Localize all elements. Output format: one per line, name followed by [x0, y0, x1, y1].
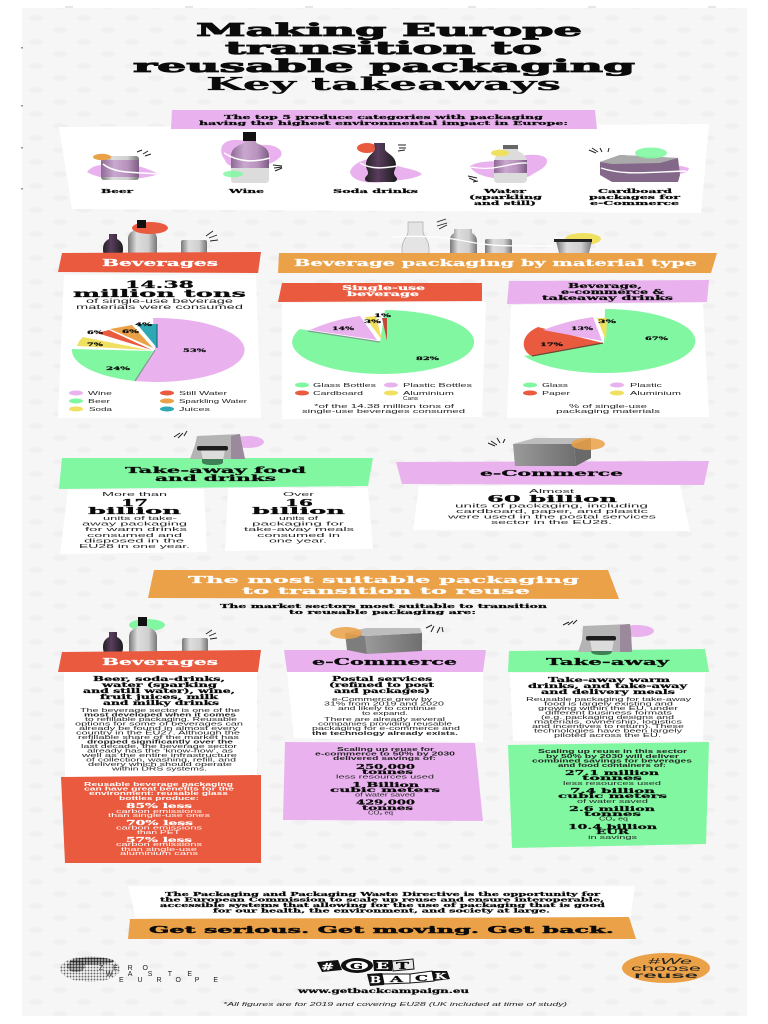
banner: top 5 heading — [171, 110, 597, 129]
callout: beverage benefits: 57% less — [126, 836, 193, 844]
text: beverages sector description: last decade, the beverage sector — [81, 744, 238, 750]
callout: e-commerce savings: 250,000 — [356, 763, 416, 771]
callout: take-away savings: less resources used — [563, 781, 661, 787]
callout: e-commerce savings: cubic meters — [330, 786, 441, 794]
title: Key takeaways — [206, 74, 561, 95]
text: e-commerce description: packaging for e-commerce and — [312, 726, 460, 732]
legend: single-use beverage: Plastic Bottles — [403, 383, 472, 389]
callout: take-away savings: tonnes — [584, 810, 642, 818]
panel: directive statement — [128, 886, 635, 920]
text: beverages sector description: delivery which should operate — [88, 762, 232, 768]
text: take-away description: Reusable packaging for take-away — [526, 697, 692, 703]
legend: single-use beverage: Aluminium — [403, 391, 455, 397]
text: take-away description: different business formats — [545, 710, 673, 716]
legend: beverages: Sparkling Water — [179, 399, 247, 405]
banner: beverages sector: Beverages — [102, 657, 218, 668]
panel: take-away food and drinks — [59, 458, 373, 554]
icon: takeaway bag — [563, 620, 654, 655]
callout: take-away savings: Scaling up reuse in this sector — [538, 749, 687, 755]
title: Making Europe — [196, 20, 582, 41]
logo: get back: T — [396, 962, 410, 972]
banner: beverages — [58, 252, 261, 273]
banner: single-use beverage — [278, 283, 482, 302]
legend: packaging materials: Paper — [542, 391, 570, 397]
text: e-commerce description: the technology already exists. — [312, 731, 459, 737]
text: take-away description — [526, 697, 692, 739]
legend: beverages: Soda — [89, 407, 114, 413]
callout: take-away savings: and food containers of: — [558, 763, 667, 769]
callout: take-away savings: EUR — [596, 828, 630, 836]
stat: 16 billion: consumed in — [257, 533, 340, 539]
text: e-commerce description: to expand. — [362, 711, 408, 717]
banner: beverage e-commerce takeaway: takeaway drinks — [542, 295, 674, 302]
legend: packaging materials — [523, 382, 682, 397]
label: water: Water — [482, 189, 526, 195]
text: take-away description: growing within the EU, under — [538, 706, 679, 712]
heading: beverages sector: fruit juices, milk — [100, 694, 220, 701]
title: transition to — [225, 38, 542, 59]
logo: we choose reuse: choose — [631, 964, 702, 973]
stat: 14.38 million tons: of single-use beverage — [86, 299, 235, 305]
callout: beverage benefits: environment: reusable glass — [89, 791, 228, 797]
pie chart: packaging materials: 17% — [540, 342, 563, 348]
callout: take-away savings: tonnes — [582, 774, 643, 782]
subheading: market sectors: to reusable packaging are: — [289, 610, 476, 616]
heading: take-away sector: drinks, and take-away — [528, 683, 688, 690]
banner: call to action: Get serious. Get moving. Get back. — [149, 925, 614, 936]
banner: e-commerce — [396, 461, 709, 485]
callout: beverage benefits: than PET — [137, 830, 180, 836]
banner: beverage packaging by material type: Beverage packaging by material type — [294, 258, 697, 269]
stat: 17 billion: billion — [88, 506, 181, 517]
stat: 14.38 million tons — [73, 280, 247, 311]
panel: top 5 produce categories — [59, 110, 709, 213]
text: e-commerce description: and likely to continue — [338, 706, 436, 712]
logo: get back: A — [388, 974, 405, 984]
label: wine: Wine — [227, 189, 265, 195]
label: water — [469, 189, 542, 207]
stat: 17 billion: disposed in the — [84, 538, 184, 544]
text: e-commerce description: companies providing reusable — [318, 722, 452, 728]
text: beverages sector description: country in the EU27. Although the — [76, 730, 240, 736]
pie chart: beverages: 4% — [135, 322, 153, 328]
legend: beverages: Beer — [88, 399, 110, 405]
stat: 16 billion: take-away meals — [244, 527, 354, 533]
text: beverages sector description: refillable share of the market has — [78, 735, 240, 741]
banner: take-away food and drinks — [59, 458, 373, 489]
logo: zero waste europe — [60, 956, 218, 984]
panel: beverage e-commerce takeaway — [507, 280, 709, 418]
legend: single-use beverage: Cans — [403, 396, 418, 402]
callout: beverage benefits: Reusable beverage packaging — [84, 782, 233, 788]
title — [133, 20, 636, 95]
stat: 16 billion: one year. — [269, 538, 328, 544]
heading: beverages sector — [83, 676, 235, 707]
banner: beverage e-commerce takeaway: Beverage, — [568, 283, 642, 290]
pie chart: beverages: 7% — [87, 342, 103, 348]
legend: packaging materials: Aluminium — [630, 391, 682, 397]
heading: e-commerce sector: (refined to post — [329, 682, 434, 689]
text: beverages sector description: of collection, washing, refill, and — [86, 758, 236, 764]
callout: take-away savings: CO₂ eq — [599, 816, 628, 822]
callout: beverage benefits: aluminium cans — [120, 851, 199, 857]
icon: cardboard box — [589, 148, 689, 182]
stat: 17 billion — [60, 489, 207, 554]
logo: zero waste europe: EUROPE — [119, 977, 218, 984]
banner: top 5 heading: having the highest environmental impact in Europe: — [199, 121, 568, 127]
panel: single-use beverage — [278, 283, 486, 419]
stat: 60 billion: units of packaging, including — [455, 504, 648, 510]
pie chart: beverages: 53% — [183, 348, 206, 354]
banner: take-away sector — [508, 649, 709, 672]
pie chart: single-use beverage: 3% — [364, 319, 382, 325]
callout: take-away savings: of water saved — [577, 799, 648, 805]
pie chart: beverages: 6% — [122, 329, 140, 335]
pie chart: single-use beverage — [292, 310, 474, 374]
panel: e-commerce — [396, 461, 709, 531]
text: take-away description: piloted across the EU. — [554, 733, 661, 739]
banner: beverages: Beverages — [102, 258, 218, 269]
text: beverages sector description: already be found in almost every — [79, 726, 239, 732]
stat: 17 billion: 17 — [121, 498, 148, 509]
label: soda drinks: Soda drinks — [333, 189, 418, 195]
pie chart: beverages: 24% — [106, 366, 130, 372]
note: packaging materials — [556, 404, 661, 415]
callout: e-commerce savings: e-commerce to 50% by 2030 — [315, 752, 455, 758]
text: take-away description: materials, ownership, logistics — [534, 720, 683, 726]
panel: directive statement: for our health, the environment, and society at large. — [213, 908, 550, 914]
text: beverages sector description — [75, 708, 243, 772]
text: e-commerce description: 31% from 2019 and 2020 — [324, 702, 444, 708]
callout: beverage benefits: than single-use ones — [108, 813, 211, 819]
callout: beverage benefits: carbon emissions — [116, 809, 203, 815]
logo: zero waste europe: ZERO — [99, 965, 149, 972]
text: e-commerce description — [312, 697, 460, 737]
callout: e-commerce savings: Scaling up reuse for — [337, 747, 434, 753]
stat: 60 billion — [445, 489, 656, 526]
panel: take-away sector — [508, 649, 709, 848]
label: cardboard packages — [589, 189, 680, 207]
stat: 60 billion: cardboard, paper, and plastic — [456, 509, 648, 515]
callout: take-away savings: 7.4 billion — [570, 787, 655, 795]
banner: top 5 heading: The top 5 produce categories with packaging — [224, 115, 543, 121]
panel: directive statement: the European Commission to scale up reuse and ensure interoperable, — [160, 898, 604, 904]
callout: e-commerce savings: tonnes — [362, 768, 414, 776]
callout: take-away savings — [508, 742, 709, 848]
banner: e-commerce sector — [284, 650, 486, 672]
heading: beverages sector: and milky drinks — [103, 700, 220, 707]
panel: beverages — [58, 252, 261, 418]
pie chart: packaging materials: 13% — [571, 326, 593, 332]
legend: beverages: Still Water — [179, 391, 227, 397]
banner: take-away sector: Take-away — [546, 658, 671, 668]
heading: e-commerce sector: and packages) — [334, 688, 430, 695]
heading: take-away sector: Take-away warm — [548, 677, 671, 684]
footnote: *All figures are for 2019 and covering EU28 (UK included at time of study) — [223, 1002, 568, 1008]
note: single-use beverage: single-use beverages consumed — [302, 409, 465, 415]
heading: take-away sector — [528, 677, 688, 696]
logo: get back: G — [350, 961, 363, 971]
text: beverages sector description: most developed when it comes — [84, 712, 236, 718]
callout: take-away savings: by 50% by 2030 will deliver — [546, 754, 679, 760]
stat: 17 billion: away packaging — [82, 522, 187, 528]
callout: take-away savings: in savings — [588, 835, 638, 841]
pie chart: single-use beverage: 14% — [332, 326, 354, 332]
icon: takeaway bag — [174, 431, 264, 465]
stat: 17 billion: for warm drinks — [85, 527, 187, 533]
label: water: (sparkling — [469, 194, 542, 201]
text: beverages sector description: dropped significantly over the — [87, 740, 233, 746]
banner: call to action — [128, 917, 636, 939]
banner: beverages sector — [58, 650, 261, 672]
banner: e-commerce sector: e-Commerce — [312, 658, 458, 668]
icon: packaging materials — [392, 219, 601, 258]
legend: beverages: Wine — [88, 391, 112, 397]
stat: 17 billion: units of take- — [103, 516, 177, 522]
legend: single-use beverage — [295, 382, 472, 402]
icon: beverage containers — [103, 220, 218, 258]
pie chart: single-use beverage: 82% — [416, 356, 439, 362]
logo: we choose reuse: reuse — [634, 971, 700, 980]
logo: get back: E — [376, 962, 389, 972]
icon: wine bottle — [221, 132, 282, 183]
heading: beverages sector: water (sparking — [100, 682, 219, 689]
panel: e-commerce sector — [283, 650, 486, 821]
legend: beverages — [69, 390, 247, 413]
label: cardboard packages: e-Commerce — [590, 201, 680, 207]
callout: e-commerce savings: 1 Billion — [352, 781, 419, 789]
panel: beverages sector — [58, 650, 261, 863]
panel: directive statement: accessible systems that allowing for the use of packaging that is good — [160, 903, 605, 909]
pie chart: packaging materials: 3% — [598, 319, 617, 325]
logo: get back: K — [435, 971, 448, 981]
text: beverages sector description: within DRS systems. — [112, 766, 207, 772]
text: beverages sector description: already has the ‘know-how’, as — [87, 748, 234, 754]
stat: 16 billion: Over — [283, 492, 314, 498]
stat: 14.38 million tons: million tons — [73, 289, 247, 300]
callout: take-away savings: 2.6 million — [569, 805, 655, 813]
icon: beer can — [87, 150, 159, 180]
stat: 60 billion: sector in the EU28. — [491, 520, 613, 526]
callout: beverage benefits: can have great benefits for the — [84, 786, 234, 792]
stat: 16 billion: 16 — [285, 498, 314, 509]
stat: 60 billion: were used in the postal services — [445, 514, 656, 520]
label: water: and still) — [474, 200, 537, 207]
callout: e-commerce savings: less resources used — [336, 774, 434, 780]
icon: beverage containers — [103, 617, 217, 655]
text: take-away description: (e.g. packaging designs and — [541, 715, 674, 721]
stat: 17 billion: More than — [102, 492, 167, 498]
text: take-away description: and incentives to return). These — [532, 724, 684, 730]
banner: beverage e-commerce takeaway: e-commerce & — [561, 289, 665, 296]
text: e-commerce description: There are already several — [324, 717, 445, 723]
note: single-use beverage: *of the 14.38 million tons of — [314, 404, 455, 410]
stat: 16 billion — [225, 488, 373, 551]
banner: most suitable packaging: to transition to reuse — [242, 586, 530, 597]
callout: beverage benefits: 85% less — [126, 802, 193, 810]
icon: cardboard box — [488, 438, 605, 466]
callout: e-commerce savings: tonnes — [362, 804, 414, 812]
subheading: market sectors: The market sectors most suitable to transition — [220, 604, 547, 610]
text: take-away description: technologies have been largely — [534, 728, 683, 734]
heading: take-away sector: and delivery meals — [541, 689, 676, 696]
pie chart: single-use beverage: 1% — [374, 313, 392, 319]
callout: e-commerce savings: delivered savings of: — [333, 756, 437, 762]
heading: e-commerce sector — [329, 676, 434, 695]
stat: 17 billion: EU28 in one year. — [79, 544, 191, 550]
legend: beverages: Juices — [179, 407, 210, 413]
logo: we choose reuse — [622, 953, 710, 983]
banner: beverage packaging by material type — [278, 253, 717, 273]
note: packaging materials: packaging materials — [556, 409, 661, 415]
callout: take-away savings: combined savings for beverages — [532, 758, 692, 764]
logo: zero waste europe: WASTE — [106, 971, 192, 978]
logo: get back: # — [321, 963, 334, 973]
title: reusable packaging — [133, 56, 636, 77]
callout: beverage benefits: bottles produce: — [119, 796, 200, 802]
text: beverages sector description: to refillable packaging. Reusable — [85, 717, 237, 723]
stat: 14.38 million tons: materials were consumed — [76, 305, 243, 311]
icon: water bottle — [468, 145, 547, 183]
stat: 16 billion: units of — [279, 516, 319, 522]
logo: get back: C — [415, 973, 428, 983]
pie chart: beverages: 6% — [87, 330, 103, 336]
callout: beverage benefits: carbon emissions — [116, 842, 203, 848]
legend: single-use beverage: Glass Bottles — [313, 383, 376, 389]
callout: e-commerce savings: of water saved — [355, 792, 415, 798]
heading: beverages sector: and still water), wine, — [83, 688, 235, 695]
logo: get back: B — [370, 976, 382, 986]
callout: take-away savings: cubic meters — [558, 792, 668, 800]
callout: e-commerce savings: CO₂ eq — [368, 810, 393, 816]
label: beer: Beer — [101, 189, 133, 195]
legend: packaging materials: Plastic — [630, 383, 662, 389]
pie chart: packaging materials — [524, 309, 695, 373]
banner: single-use beverage: Single-use — [342, 285, 425, 292]
legend: packaging materials: Glass — [542, 383, 568, 389]
note: packaging materials: % of single-use — [569, 404, 647, 410]
text: beverages sector description: options for some of beverages can — [75, 722, 243, 728]
label: cardboard packages: packages for — [589, 195, 680, 201]
text: e-commerce description: e-Commerce grew by — [332, 697, 433, 703]
callout: beverage benefits — [61, 775, 261, 863]
banner: beverage e-commerce takeaway — [507, 280, 709, 304]
pie chart: beverages — [72, 318, 245, 382]
callout: take-away savings: 10.4 billion — [568, 823, 657, 831]
banner: most suitable packaging: The most suitable packaging — [188, 575, 580, 586]
banner: take-away food and drinks: and drinks — [155, 473, 277, 483]
icon: cardboard box — [330, 625, 443, 654]
banner: single-use beverage: beverage — [347, 291, 419, 298]
text: website: www.getbackcampaign.eu — [296, 988, 470, 995]
note: single-use beverage — [302, 404, 465, 415]
callout: beverage benefits: than single-use — [121, 847, 197, 853]
text: beverages sector description: The beverage sector is one of the — [80, 708, 240, 714]
text: take-away description: food is largely existing and — [544, 702, 673, 708]
logo: get back — [317, 958, 450, 986]
pie chart: packaging materials: 67% — [645, 336, 668, 342]
banner: take-away food and drinks: Take-away food — [125, 465, 307, 475]
callout: beverage benefits: carbon emissions — [116, 826, 203, 832]
callout: e-commerce savings — [283, 742, 483, 821]
subheading: market sectors — [220, 604, 547, 616]
banner: most suitable packaging — [148, 570, 619, 599]
banner: e-commerce: e-Commerce — [480, 468, 623, 478]
stat: 60 billion: Almost — [529, 489, 575, 495]
logo: we choose reuse: #We — [648, 957, 693, 966]
label: cardboard packages: Cardboard — [598, 189, 672, 195]
panel: directive statement: The Packaging and Packaging Waste Directive is the opportunity for — [165, 892, 600, 898]
stat: 16 billion: billion — [252, 506, 345, 517]
heading: beverages sector: Beer, soda-drinks, — [93, 676, 225, 683]
stat: 60 billion: 60 billion — [487, 494, 617, 505]
stat: 17 billion: consumed and — [87, 533, 182, 539]
heading: e-commerce sector: Postal services — [332, 676, 433, 683]
callout: beverage benefits: 70% less — [126, 819, 194, 827]
callout: take-away savings: 27.1 million — [565, 769, 659, 777]
stat: 14.38 million tons: 14.38 — [125, 280, 194, 291]
text: beverages sector description: well as the entire infrastructure — [82, 753, 237, 759]
callout: e-commerce savings: 429,000 — [356, 798, 416, 806]
icon: soda bottle — [350, 143, 422, 183]
legend: single-use beverage: Cardboard — [313, 391, 363, 397]
stat: 16 billion: packaging for — [252, 522, 344, 528]
